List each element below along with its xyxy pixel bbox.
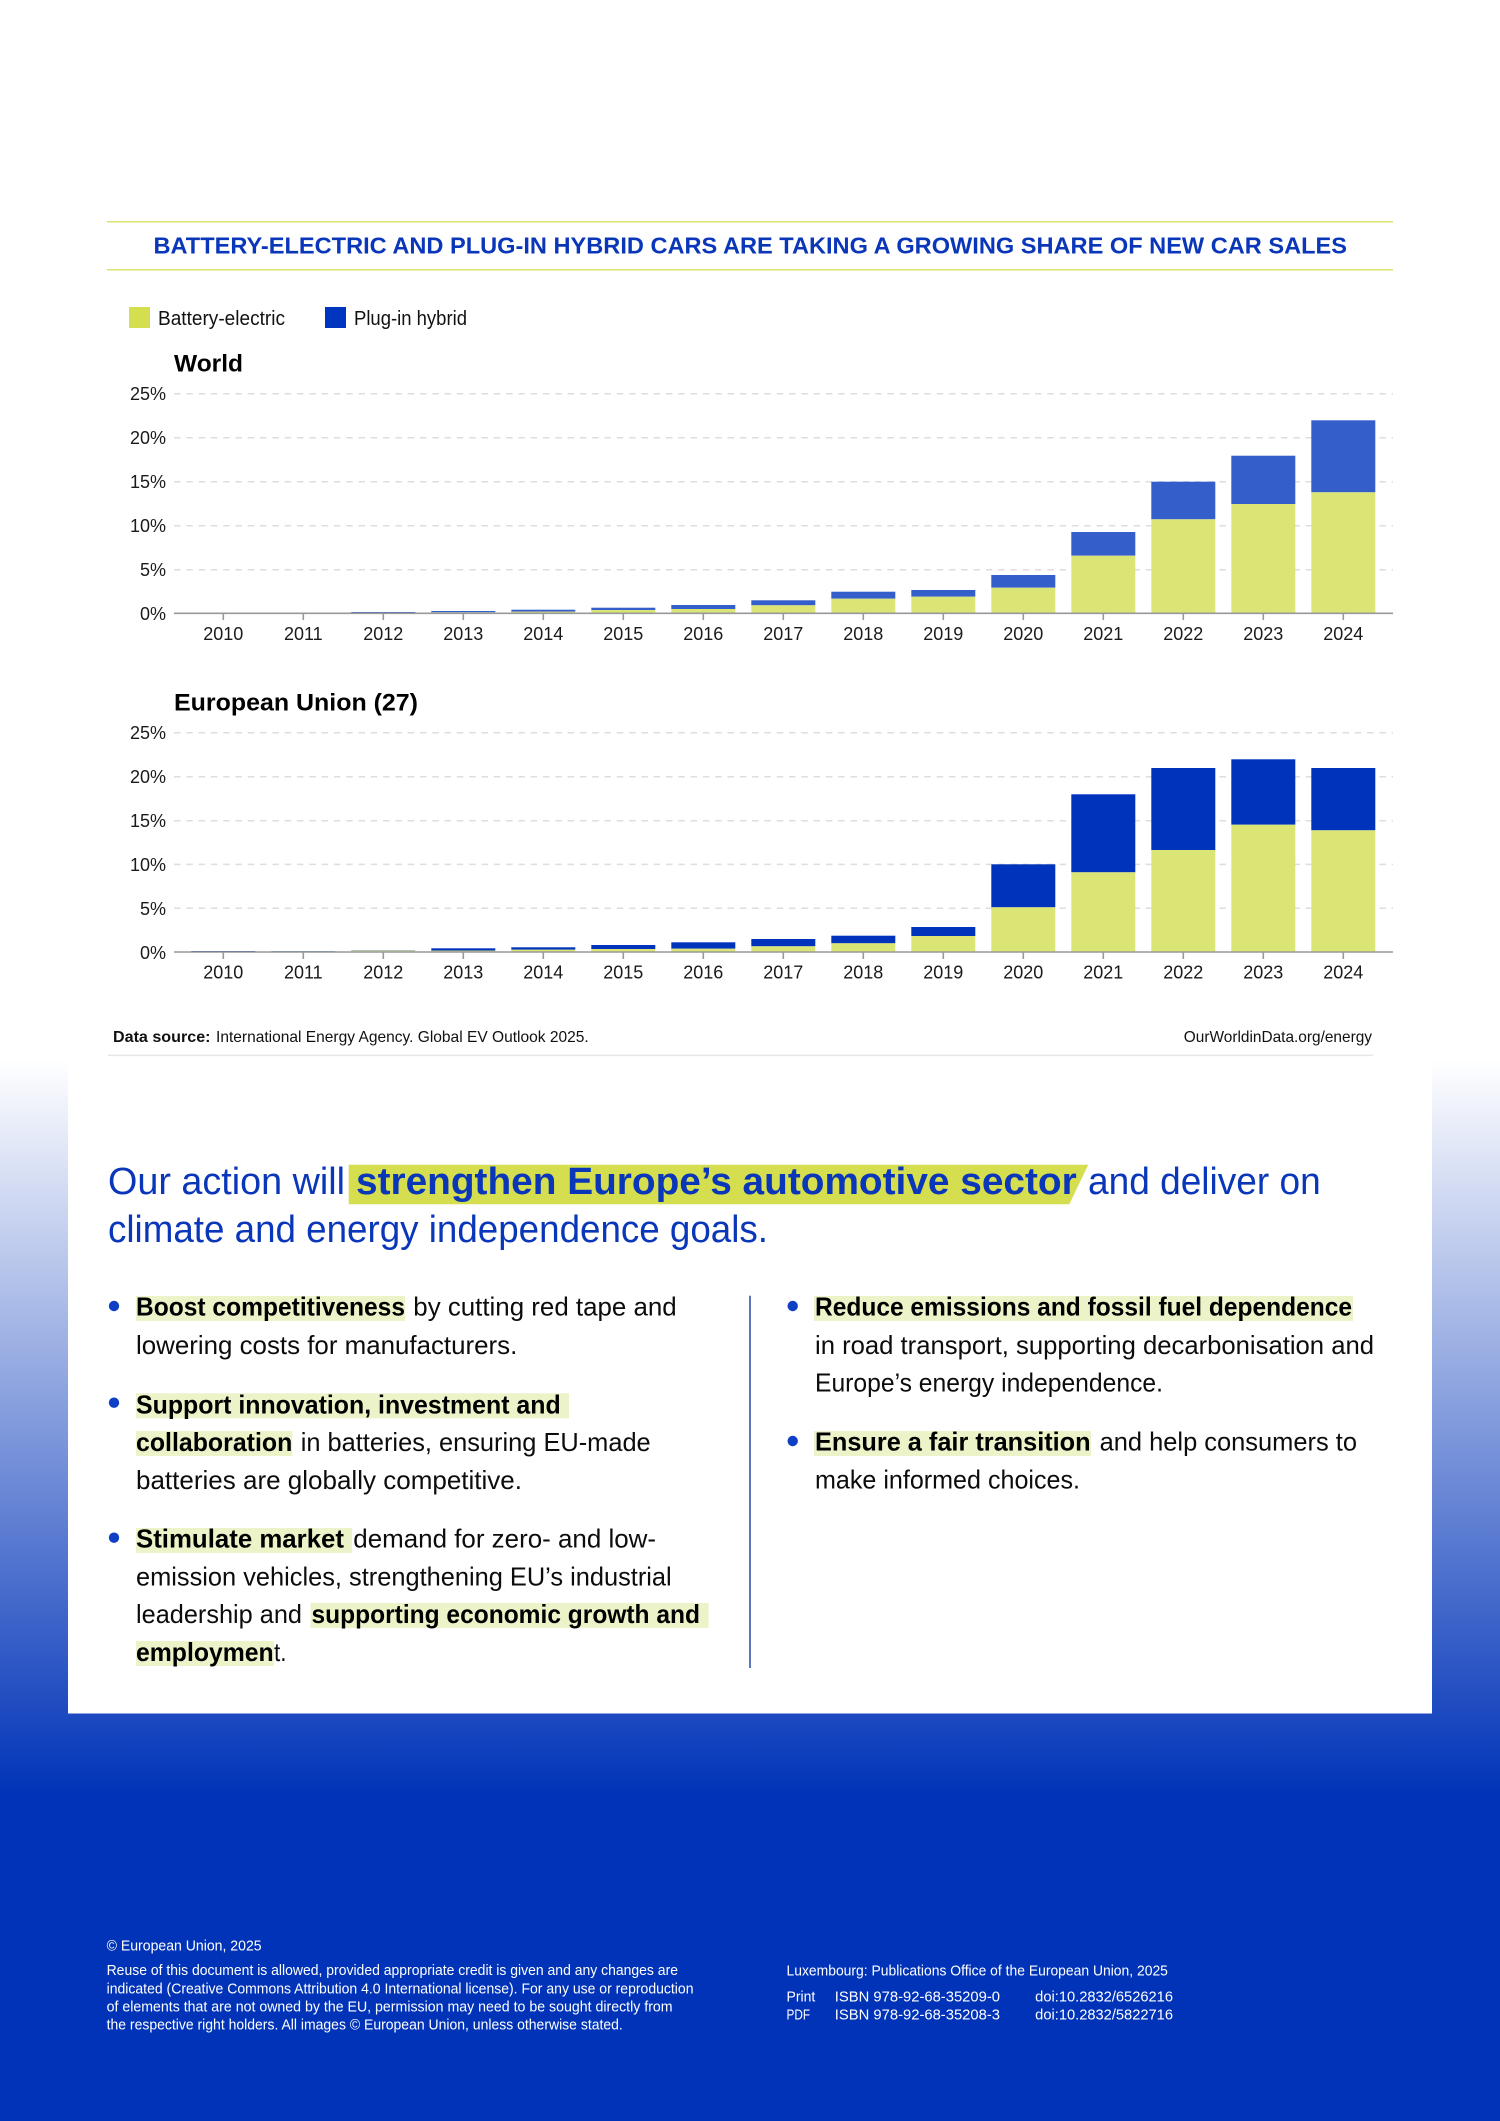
footer: copyright and reuse bbox=[107, 1939, 694, 2033]
headline: strengthen Europe’s automotive sector bbox=[356, 1161, 1077, 1203]
bullet: boost competitiveness: by cutting red tape and bbox=[413, 1292, 677, 1322]
bullet: support innovation: Support innovation, investment and bbox=[136, 1389, 561, 1419]
x axis labels: World: 2011 bbox=[284, 624, 323, 644]
bullet: boost competitiveness: lowering costs for manufacturers. bbox=[136, 1330, 517, 1360]
y axis labels: European Union: 0% bbox=[140, 943, 166, 963]
x axis labels: European Union: 2020 bbox=[1003, 963, 1043, 983]
x axis labels: European Union: 2017 bbox=[763, 963, 803, 983]
bullet: ensure a fair transition: and help consumers to bbox=[1100, 1427, 1357, 1457]
y axis labels: European Union: 15% bbox=[130, 811, 166, 831]
y axis labels: European Union: 25% bbox=[130, 723, 166, 743]
bullet: boost competitiveness bbox=[109, 1292, 677, 1360]
x axis labels: World: 2013 bbox=[443, 624, 483, 644]
footer: copyright and reuse: © European Union, 2025 bbox=[107, 1939, 262, 1955]
footer: publication details: ISBN 978-92-68-35208-3 bbox=[835, 2008, 1000, 2024]
x axis labels: World: 2018 bbox=[843, 624, 883, 644]
footer: publication details: Print bbox=[786, 1990, 815, 2006]
heading: World: World bbox=[174, 351, 243, 378]
bullet: support innovation bbox=[109, 1389, 651, 1495]
y axis labels: World: 10% bbox=[130, 516, 166, 536]
heading: European Union (27): European Union (27) bbox=[174, 689, 418, 716]
footer: copyright and reuse: of elements that are not owned by the EU, permission may need to be sought directly from bbox=[107, 1999, 673, 2015]
x axis labels: European Union: 2011 bbox=[284, 963, 323, 983]
y axis labels: World: 20% bbox=[130, 428, 166, 448]
y axis labels: European Union bbox=[130, 723, 166, 963]
footer: publication details: doi:10.2832/5822716 bbox=[1035, 2008, 1173, 2024]
white content panel bbox=[68, 1060, 1432, 1714]
bullet: reduce emissions: in road transport, supporting decarbonisation and bbox=[815, 1330, 1374, 1360]
x axis labels: European Union: 2021 bbox=[1083, 963, 1123, 983]
bullet: reduce emissions: Reduce emissions and fossil fuel dependence bbox=[815, 1292, 1352, 1322]
x axis labels: World: 2024 bbox=[1323, 624, 1363, 644]
bullet: stimulate market: leadership and bbox=[136, 1599, 302, 1629]
footer: copyright and reuse: Reuse of this document is allowed, provided appropriate credit is given and any changes are bbox=[107, 1963, 678, 1979]
x axis labels: World: 2012 bbox=[363, 624, 403, 644]
x axis labels: World: 2016 bbox=[683, 624, 723, 644]
chart: World bbox=[130, 351, 1393, 644]
y axis labels: European Union: 20% bbox=[130, 767, 166, 787]
column divider bbox=[749, 1296, 751, 1668]
x axis labels: European Union: 2018 bbox=[843, 963, 883, 983]
x axis labels: European Union: 2016 bbox=[683, 963, 723, 983]
bullet: reduce emissions bbox=[788, 1292, 1374, 1398]
headline: Our action will bbox=[108, 1161, 345, 1203]
bullet: reduce emissions: Europe’s energy independence. bbox=[815, 1368, 1163, 1398]
y axis labels: European Union: 10% bbox=[130, 855, 166, 875]
x axis labels: World: 2020 bbox=[1003, 624, 1043, 644]
footer: publication details: PDF bbox=[786, 2008, 810, 2024]
battery-electric bars: World bbox=[351, 492, 1375, 613]
x axis labels: European Union: 2015 bbox=[603, 963, 643, 983]
bullet: support innovation: in batteries, ensuring EU-made bbox=[301, 1427, 651, 1457]
bullet: boost competitiveness: Boost competitiveness bbox=[136, 1292, 405, 1322]
plug-in hybrid bars: World bbox=[191, 420, 1375, 613]
footer: copyright and reuse: the respective right holders. All images © European Union, unless otherwise stated. bbox=[107, 2017, 623, 2033]
x axis labels: European Union: 2013 bbox=[443, 963, 483, 983]
x axis labels: European Union: 2022 bbox=[1163, 963, 1203, 983]
footer: copyright and reuse: indicated (Creative Commons Attribution 4.0 International license). For any use or reproduction bbox=[107, 1981, 694, 1997]
legend: Battery-electric bbox=[158, 308, 285, 330]
headline: climate and energy independence goals. bbox=[108, 1209, 768, 1251]
bullet: support innovation: collaboration bbox=[136, 1427, 292, 1457]
data source: Data source: bbox=[113, 1029, 210, 1046]
legend bbox=[129, 307, 467, 330]
x axis labels: World: 2019 bbox=[923, 624, 963, 644]
bullet: stimulate market: emission vehicles, strengthening EU’s industrial bbox=[136, 1561, 672, 1591]
x axis labels: World: 2015 bbox=[603, 624, 643, 644]
bullet: stimulate market: supporting economic growth and bbox=[312, 1599, 700, 1629]
x axis labels: World: 2021 bbox=[1083, 624, 1123, 644]
data source bbox=[108, 1029, 1373, 1056]
x axis labels: European Union: 2014 bbox=[523, 963, 563, 983]
y axis labels: World bbox=[130, 384, 166, 624]
x axis labels: World bbox=[203, 624, 1363, 644]
footer: publication details: doi:10.2832/6526216 bbox=[1035, 1990, 1173, 2006]
y axis labels: European Union: 5% bbox=[140, 899, 166, 919]
x axis labels: World: 2017 bbox=[763, 624, 803, 644]
bullet: support innovation: batteries are globally competitive. bbox=[136, 1465, 522, 1495]
y axis labels: World: 25% bbox=[130, 384, 166, 404]
bullet: stimulate market: t. bbox=[274, 1637, 286, 1667]
x axis labels: European Union: 2019 bbox=[923, 963, 963, 983]
headline: and deliver on bbox=[1088, 1161, 1321, 1203]
footer: publication details: ISBN 978-92-68-35209-0 bbox=[835, 1990, 1000, 2006]
y axis labels: World: 0% bbox=[140, 604, 166, 624]
battery-electric bars: European Union bbox=[351, 825, 1375, 952]
plug-in hybrid bars: European Union bbox=[191, 759, 1375, 952]
x axis labels: World: 2010 bbox=[203, 624, 243, 644]
footer: publication details bbox=[786, 1964, 1173, 2024]
x axis labels: European Union: 2012 bbox=[363, 963, 403, 983]
chart: European Union (27) bbox=[130, 689, 1393, 983]
x axis labels: European Union: 2023 bbox=[1243, 963, 1283, 983]
bullet: stimulate market bbox=[109, 1523, 709, 1667]
bullet: ensure a fair transition: Ensure a fair transition bbox=[815, 1427, 1091, 1457]
x axis labels: European Union: 2024 bbox=[1323, 963, 1363, 983]
x axis labels: World: 2023 bbox=[1243, 624, 1283, 644]
x axis labels: World: 2022 bbox=[1163, 624, 1203, 644]
bullet: stimulate market: Stimulate market bbox=[136, 1523, 344, 1553]
data source: International Energy Agency. Global EV Outlook 2025. bbox=[216, 1029, 589, 1046]
y axis labels: World: 15% bbox=[130, 472, 166, 492]
bullet: ensure a fair transition bbox=[788, 1427, 1357, 1494]
legend: Plug-in hybrid bbox=[354, 308, 467, 330]
bullet: ensure a fair transition: make informed choices. bbox=[815, 1464, 1080, 1494]
x axis labels: European Union: 2010 bbox=[203, 963, 243, 983]
bullet: stimulate market: employmen bbox=[136, 1637, 274, 1667]
chart title: BATTERY-ELECTRIC AND PLUG-IN HYBRID CARS ARE TAKING A GROWING SHARE OF NEW CAR SALES bbox=[154, 232, 1347, 258]
bullet: stimulate market: demand for zero- and low- bbox=[353, 1523, 656, 1553]
data source: OurWorldinData.org/energy bbox=[1184, 1029, 1372, 1046]
x axis labels: World: 2014 bbox=[523, 624, 563, 644]
y axis labels: World: 5% bbox=[140, 560, 166, 580]
footer: publication details: Luxembourg: Publications Office of the European Union, 2025 bbox=[786, 1964, 1168, 1980]
headline bbox=[108, 1161, 1321, 1251]
x axis labels: European Union bbox=[203, 963, 1363, 983]
